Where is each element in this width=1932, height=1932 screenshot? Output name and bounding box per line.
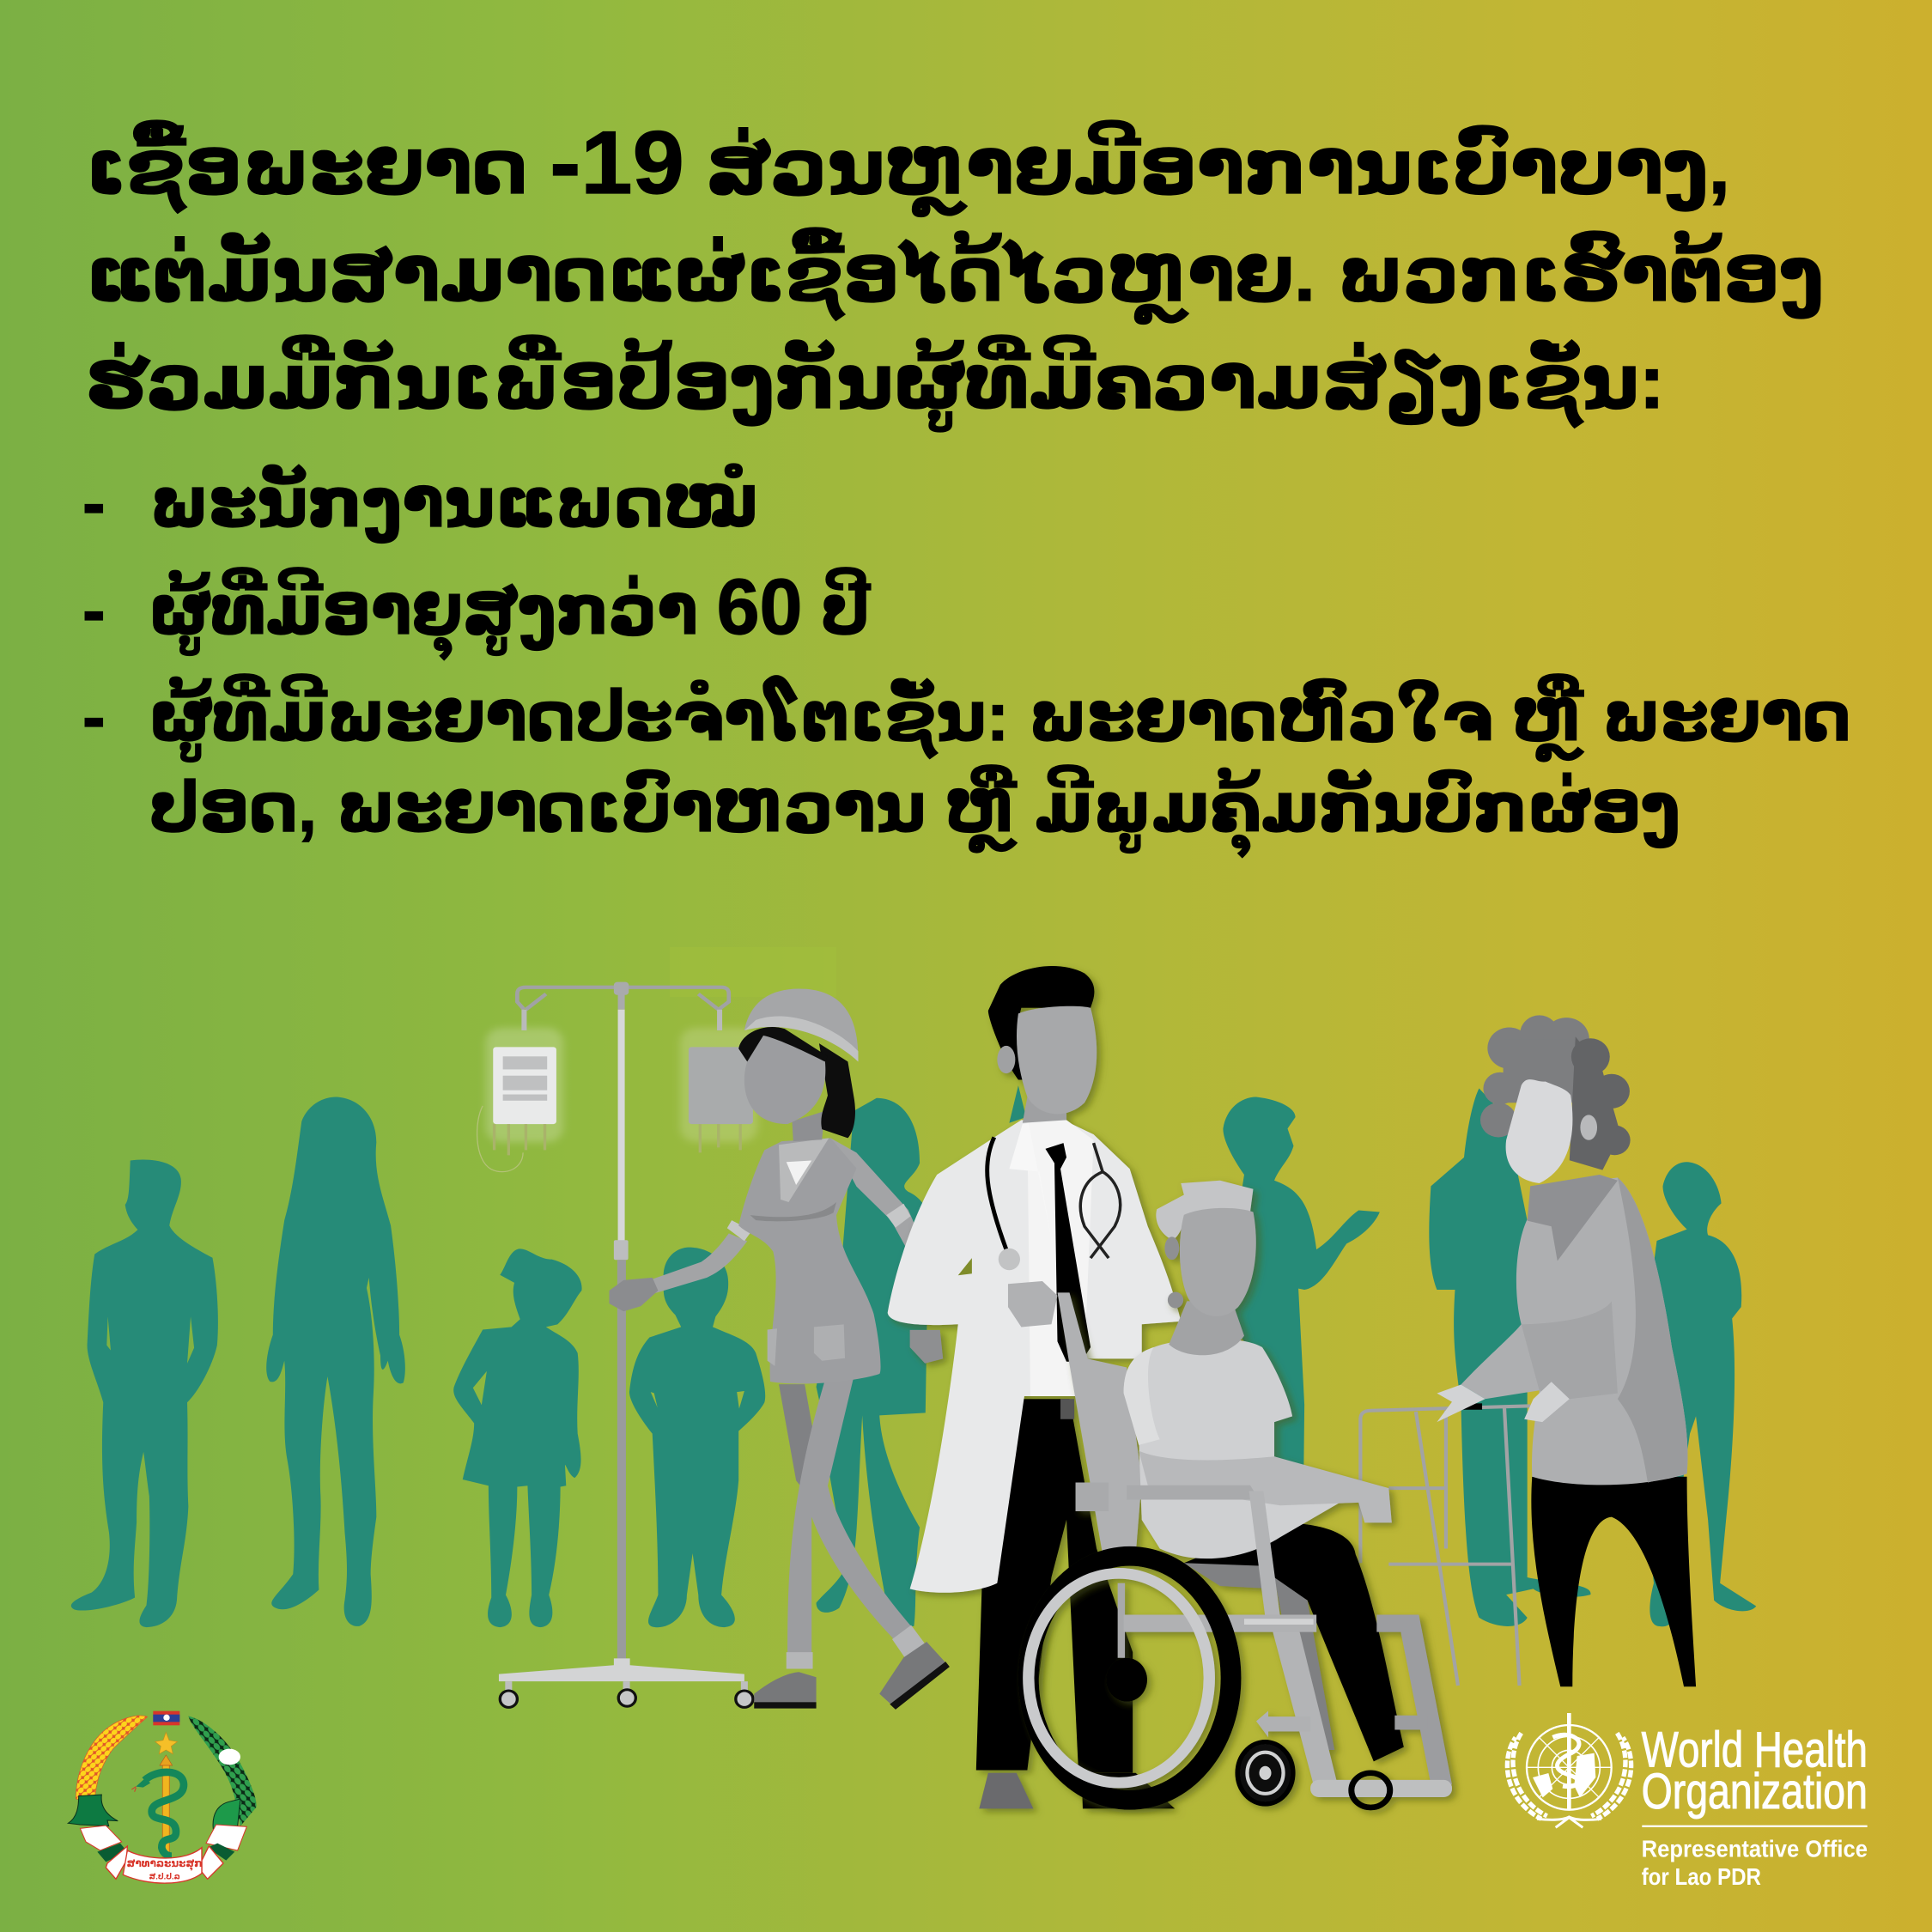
- silhouette: man: [71, 1159, 218, 1627]
- ribbons and motto: [80, 1825, 246, 1883]
- silhouette: girl: [453, 1249, 582, 1627]
- heading paragraph: ແຕ່ມັນສາມາດແຜ່ເຊື້ອໄດ້ໄວຫຼາຍ. ພວກເຮົາຕ້ອງ: [86, 227, 1824, 325]
- illustration: left group: [71, 982, 950, 1710]
- heading paragraph: ຮ່ວມມືກັນເພື່ອປ້ອງກັນຜູ້ທີ່ມີຄວາມສ່ຽງເຊັ່ນ:: [86, 334, 1665, 432]
- risk group list: -: [82, 572, 106, 648]
- silhouette: woman behind old woman: [1429, 1089, 1591, 1626]
- ribbons and motto: ສາທາລະນະສຸກ: [127, 1857, 203, 1871]
- WHO emblem: [1507, 1713, 1631, 1827]
- old woman: [1437, 1015, 1696, 1686]
- WHO wordmark: [1642, 1723, 1868, 1890]
- WHO wordmark: Organization: [1642, 1765, 1868, 1820]
- risk group list: [82, 463, 1851, 859]
- patient in wheelchair: [1029, 1181, 1452, 1807]
- logo: Lao Ministry of Health emblem: [68, 1711, 257, 1883]
- WHO wordmark: World Health: [1642, 1723, 1868, 1778]
- silhouette peek by doctor neck: [1009, 1085, 1026, 1123]
- WHO wordmark: Representative Office: [1642, 1836, 1868, 1862]
- IV stand: [499, 982, 753, 1707]
- illustration: right group: [888, 966, 1756, 1808]
- silhouette: woman behind nurse: [817, 1098, 929, 1626]
- flag: [153, 1711, 179, 1725]
- risk group list: ຜູ້ທີ່ມີພະຍາດປະຈຳໂຕເຊັ່ນ: ພະຍາດຫົວໃຈ ຫຼື ພະຍາດ: [149, 673, 1851, 762]
- risk group list: -: [82, 465, 106, 541]
- silhouette: man with raised arm: [1223, 1097, 1380, 1520]
- silhouette: person at far right: [1636, 1162, 1756, 1626]
- risk group list: ພະນັກງານແພດໝໍ: [149, 463, 758, 543]
- wheat wreath: [68, 1716, 148, 1826]
- walker frame: [1360, 1406, 1562, 1686]
- logo: World Health Organization: [1507, 1713, 1868, 1890]
- silhouette: boy: [629, 1248, 765, 1627]
- risk group list: ປອດ, ພະຍາດເບົາຫວານ ຫຼື ມີພູມຄຸ້ມກັນບົກຜ່ອງ: [149, 764, 1680, 859]
- leaf wreath: [188, 1716, 257, 1829]
- heading paragraph: ເຊື້ອພະຍາດ -19 ສ່ວນຫຼາຍມີອາການເບົາບາງ,: [86, 113, 1730, 217]
- risk group list: ຜູ້ທີ່ມີອາຍຸສູງກວ່າ 60 ປີ: [149, 563, 872, 661]
- risk group list: -: [82, 678, 106, 755]
- heading paragraph: [86, 113, 1824, 432]
- star: [155, 1732, 178, 1754]
- silhouette: woman with long hair: [266, 1097, 405, 1626]
- WHO wordmark: for Lao PDR: [1642, 1863, 1761, 1890]
- doctor: [888, 966, 1181, 1808]
- nurse: [610, 989, 950, 1710]
- ribbons and motto: ສ.ປ.ປ.ລ: [149, 1872, 180, 1880]
- IV bags: [477, 1028, 757, 1172]
- rod and snake: [131, 1755, 184, 1857]
